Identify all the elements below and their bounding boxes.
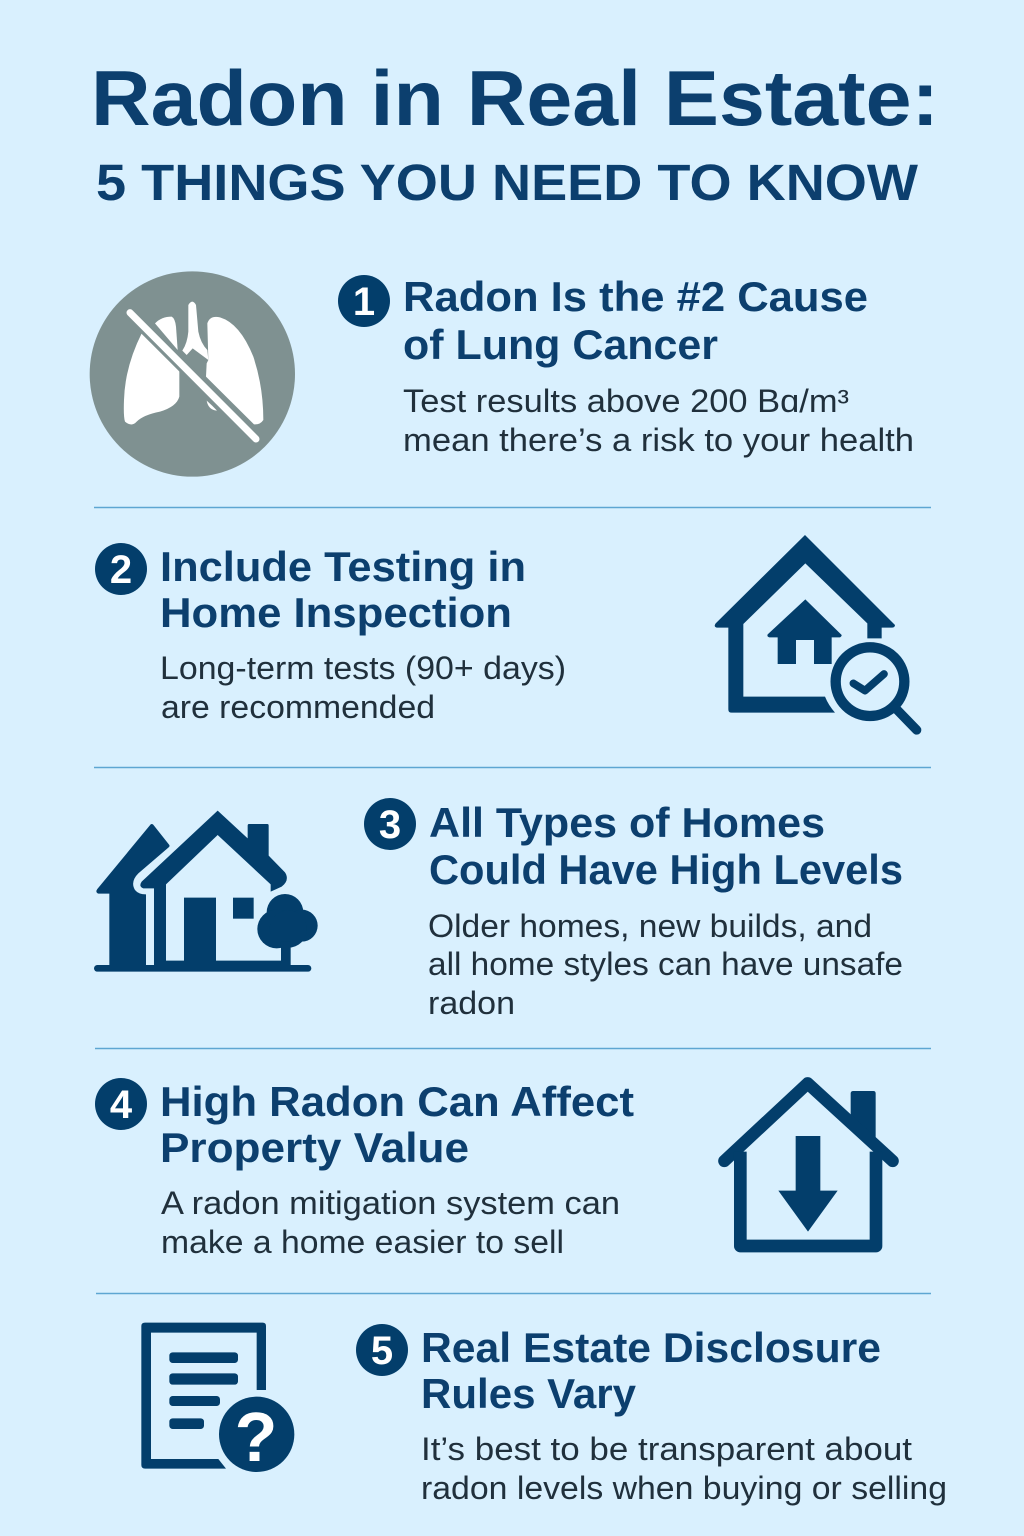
heading 5: Real Estate Disclosure — [421, 1324, 881, 1371]
heading 3: Could Have High Levels — [429, 846, 903, 893]
title — [91, 54, 939, 211]
heading 5 — [421, 1324, 881, 1417]
number badge 2: 2 — [110, 548, 132, 592]
body text 1: mean there’s a risk to your health — [403, 422, 914, 458]
panel: item 1 radon cause — [90, 271, 914, 477]
body text 3 — [428, 908, 903, 1021]
panel: item 3 home types — [96, 798, 903, 1021]
number badge 4 — [95, 1078, 147, 1130]
body text 5 — [421, 1431, 947, 1506]
number badge 2 — [95, 543, 147, 595]
body text 1 — [403, 383, 914, 458]
panel: item 5 disclosure — [141, 1323, 947, 1506]
heading 1: Radon Is the #2 Cause — [403, 273, 868, 320]
heading 2: Home Inspection — [160, 589, 512, 636]
body text 4: make a home easier to sell — [161, 1224, 564, 1260]
body text 2: Long-term tests (90+ days) — [160, 650, 566, 686]
number badge 5: 5 — [371, 1329, 393, 1373]
body text 5: radon levels when buying or selling — [421, 1470, 947, 1506]
number badge 5 — [356, 1324, 408, 1376]
body text 3: all home styles can have unsafe — [428, 946, 903, 982]
title: 5 THINGS YOU NEED TO KNOW — [96, 154, 919, 211]
icon: crossed-out lungs — [90, 271, 295, 477]
title: Radon in Real Estate: — [91, 54, 939, 142]
icon: house with down arrow — [724, 1083, 893, 1246]
heading 1: of Lung Cancer — [403, 321, 718, 368]
icon: houses and tree — [96, 811, 318, 968]
body text 2 — [160, 650, 566, 725]
body text 2: are recommended — [161, 689, 435, 725]
heading 4: Property Value — [160, 1124, 469, 1171]
number badge 1: 1 — [353, 280, 375, 324]
heading 4 — [160, 1078, 634, 1171]
number badge 1 — [338, 275, 390, 327]
heading 4: High Radon Can Affect — [160, 1078, 634, 1125]
number badge 3 — [364, 798, 416, 850]
heading 3: All Types of Homes — [429, 799, 825, 846]
body text 5: It’s best to be transparent about — [421, 1431, 912, 1467]
body text 1: Test results above 200 Bɑ/m³ — [403, 383, 849, 419]
panel: item 4 property value — [95, 1078, 893, 1260]
icon: house with magnifying glass — [715, 535, 917, 730]
body text 3: radon — [428, 985, 515, 1021]
heading 2: Include Testing in — [160, 543, 526, 590]
heading 1 — [403, 273, 868, 368]
heading 2 — [160, 543, 526, 636]
panel: item 2 testing — [95, 535, 917, 730]
number badge 4: 4 — [110, 1083, 133, 1127]
number badge 3: 3 — [379, 803, 401, 847]
body text 4 — [161, 1185, 620, 1260]
icon: document with question mark: ? — [235, 1398, 277, 1476]
body text 3: Older homes, new builds, and — [428, 908, 872, 944]
heading 3 — [429, 799, 903, 893]
icon: document with question mark — [141, 1323, 294, 1476]
heading 5: Rules Vary — [421, 1370, 637, 1417]
body text 4: A radon mitigation system can — [161, 1185, 620, 1221]
